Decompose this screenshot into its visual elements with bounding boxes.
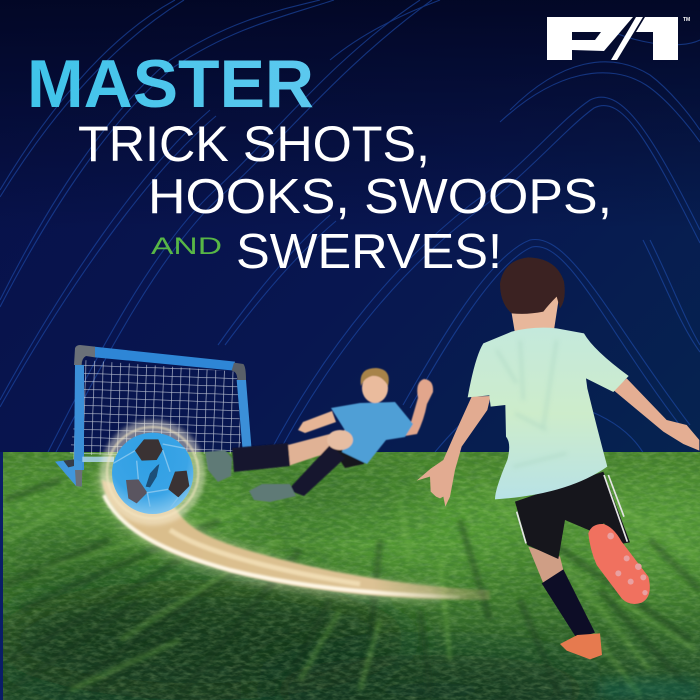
ball patches (126, 439, 189, 503)
sliding boy shoes (205, 450, 296, 502)
running boy left arm (417, 396, 491, 507)
running boy sock (542, 569, 595, 638)
ball trail (98, 470, 490, 600)
running boy shoe (560, 633, 602, 659)
running boy shirt (468, 328, 629, 499)
heading: and: AND (151, 233, 222, 260)
running boy neck (510, 290, 559, 333)
boy running (417, 257, 699, 659)
sliding boy hair (361, 368, 389, 386)
running boy shoe sole (588, 524, 650, 604)
goal frame (55, 345, 252, 487)
trademark: TM (683, 17, 690, 23)
goal (55, 345, 252, 487)
trail glow (98, 470, 440, 600)
sliding boy raised arm (403, 379, 433, 436)
sliding boy left arm (298, 411, 336, 433)
contour lines (0, 0, 700, 456)
heading: swerves: SWERVES! (236, 225, 502, 279)
dark radial grass streaks (5, 480, 700, 695)
running boy shorts stripes (517, 475, 627, 543)
sliding boy knee (327, 430, 353, 450)
ball logo (146, 464, 159, 487)
heading: trick shots: TRICK SHOTS, (78, 116, 430, 172)
left edge strip (0, 452, 3, 700)
running boy shirt folds (497, 340, 567, 467)
sliding boy shirt (331, 402, 413, 464)
running boy right arm (613, 378, 699, 451)
trail body (102, 480, 490, 600)
sliding boy thigh (288, 430, 358, 466)
goal net (68, 360, 242, 463)
boy sliding (205, 368, 433, 502)
grass field (0, 452, 700, 700)
heading: master: MASTER (27, 46, 314, 122)
sliding boy head (362, 373, 388, 403)
P1 logo (547, 17, 678, 60)
soccer ball (100, 420, 205, 525)
light radial grass streaks (5, 480, 700, 695)
running boy hair (500, 257, 565, 314)
running boy leg (528, 547, 563, 583)
sliding boy socks (232, 443, 345, 496)
running boy shorts (515, 472, 630, 559)
heading: hooks swoops: HOOKS, SWOOPS, (148, 170, 612, 224)
ball seams (113, 444, 185, 508)
running boy sole studs (607, 533, 648, 595)
trail inner streak (170, 530, 360, 584)
trail highlight (104, 495, 460, 597)
sliding boy shorts (332, 436, 365, 468)
